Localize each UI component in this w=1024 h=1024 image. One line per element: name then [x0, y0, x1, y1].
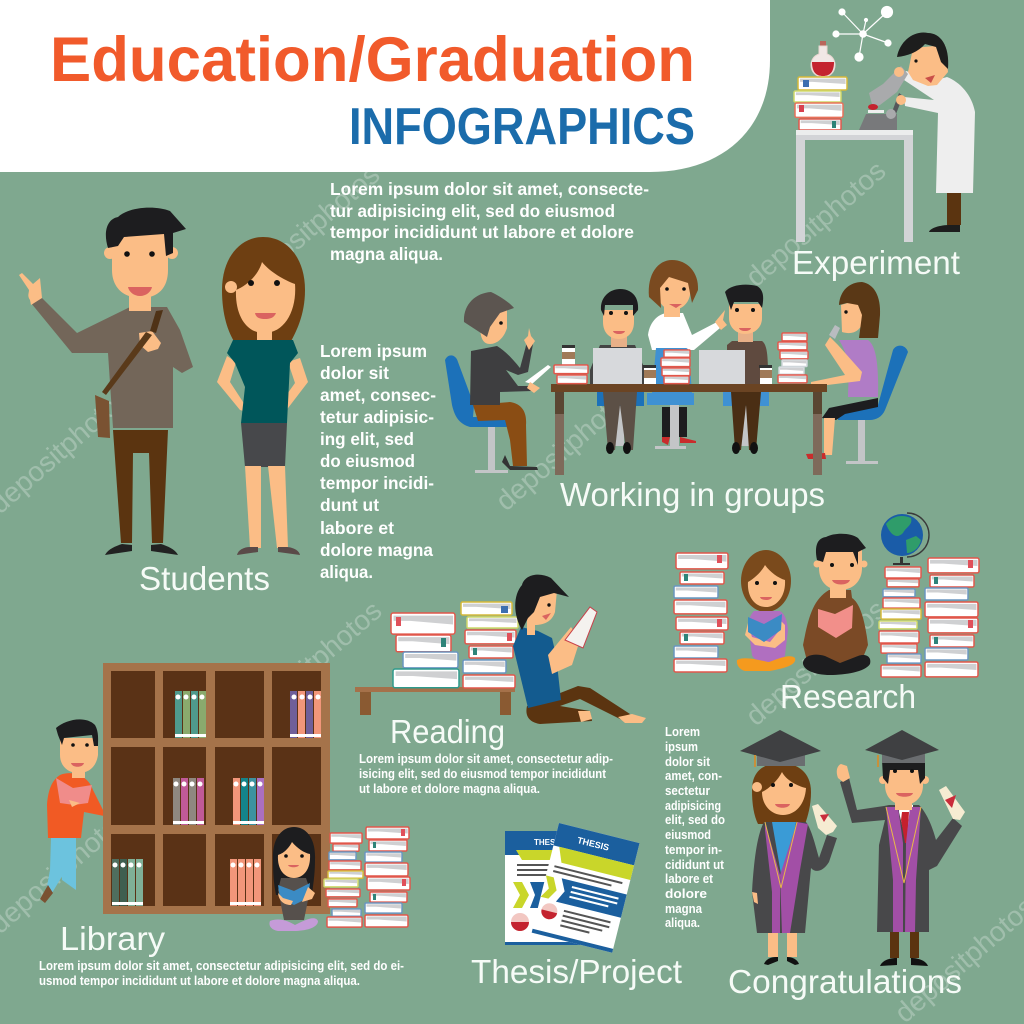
paragraph: top — [330, 179, 649, 264]
paragraph: library: usmod tempor incididunt ut labore et dolore magna aliqua. — [39, 973, 360, 988]
book stack: right — [925, 558, 979, 677]
label: library: Library — [60, 920, 166, 957]
label: congratulations: Congratulations — [728, 963, 962, 1000]
paragraph: thesis: cididunt ut — [665, 857, 725, 872]
graduate man — [837, 730, 965, 966]
icon: flask — [811, 41, 835, 77]
person: standing woman — [647, 260, 727, 449]
paragraph: reading — [359, 751, 613, 796]
icon: microscope — [859, 66, 908, 130]
paragraph: students: do eiusmod — [320, 451, 415, 471]
girl reading on floor — [269, 827, 318, 931]
watermarks: depositphotos — [236, 595, 388, 733]
reading man — [513, 575, 646, 724]
paragraph: thesis: dolore — [665, 886, 707, 901]
paragraph: reading: Lorem ipsum dolor sit amet, consectetur adip- — [359, 751, 613, 766]
person: man right of woman — [699, 285, 769, 454]
paragraph: top: Lorem ipsum dolor sit amet, consecte- — [330, 179, 649, 199]
lab table — [796, 130, 913, 242]
coffee cups — [562, 345, 772, 384]
person: man with laptop — [590, 289, 645, 454]
label: working in groups: Working in groups — [560, 476, 825, 513]
paragraph: students: aliqua. — [320, 562, 373, 582]
paragraph: thesis: adipisicing — [665, 798, 721, 813]
paragraph: thesis: labore et — [665, 871, 714, 886]
paragraph: reading: isicing elit, sed do eiusmod tempor incididunt — [359, 766, 607, 781]
paragraph: thesis: Lorem — [665, 724, 700, 739]
icon: globe — [881, 513, 929, 565]
panel: thesis — [505, 823, 640, 953]
book stack: beside case right — [365, 827, 410, 927]
title: Education/Graduation — [50, 25, 695, 95]
paragraph: students: tetur adipisic- — [320, 407, 434, 427]
person: right woman with chair — [806, 282, 908, 464]
paragraph: thesis: eiusmod — [665, 827, 711, 842]
label: reading: Reading — [390, 713, 505, 750]
book stack: beside case left — [324, 833, 363, 927]
watermarks: depositphotos — [740, 594, 892, 732]
graduation cap: man — [865, 730, 939, 767]
graduate woman — [740, 730, 837, 965]
paragraph: thesis: tempor in- — [665, 842, 722, 857]
paragraph: students: labore et — [320, 518, 394, 538]
panel: library — [40, 663, 410, 931]
paragraph: library — [39, 958, 404, 988]
shelf books — [112, 691, 321, 906]
subtitle: INFOGRAPHICS — [349, 98, 695, 156]
watermarks: depositphotos — [234, 159, 386, 297]
paragraph: students: dolor sit — [320, 363, 389, 383]
book stack: right — [461, 602, 518, 688]
book stack: left — [674, 553, 728, 672]
panel: working in groups — [445, 260, 908, 475]
paragraph: students: dolore magna — [320, 540, 433, 560]
paragraph: students: Lorem ipsum — [320, 341, 427, 361]
watermarks: depositphotos — [490, 379, 642, 517]
paragraph: top: magna aliqua. — [330, 244, 443, 264]
book stack: middle — [879, 567, 921, 677]
bench — [355, 687, 515, 715]
student: girl reading — [737, 550, 795, 671]
paragraph: thesis — [665, 724, 725, 930]
paragraph: thesis: dolor sit — [665, 754, 711, 769]
table book stacks — [554, 333, 808, 384]
paragraph: thesis: amet, con- — [665, 768, 722, 783]
boy with book — [40, 719, 104, 903]
paragraph: students: ing elit, sed — [320, 429, 414, 449]
label: research: Research — [780, 678, 916, 715]
paragraph: library: Lorem ipsum dolor sit amet, consectetur adipisicing elit, sed do ei- — [39, 958, 404, 973]
bookcase — [103, 663, 330, 914]
student man — [19, 208, 193, 555]
paragraph: thesis: magna — [665, 901, 703, 916]
scientist — [897, 32, 975, 232]
graduation cap: woman — [740, 730, 821, 767]
paragraph: students — [320, 341, 436, 582]
watermarks: depositphotos — [740, 155, 892, 293]
person: left with chair — [445, 292, 551, 473]
book stack: left — [391, 613, 459, 688]
paragraph: top: tempor incididunt ut labore et dolore — [330, 222, 634, 242]
paragraph: reading: ut labore et dolore magna aliqua. — [359, 781, 540, 796]
panel: reading — [355, 575, 646, 724]
paragraph: top: tur adipisicing elit, sed do eiusmod — [330, 201, 615, 221]
student: boy reading — [803, 534, 870, 675]
book stack — [794, 77, 847, 130]
paragraph: thesis: aliqua. — [665, 915, 700, 930]
label: students: Students — [139, 560, 270, 597]
panel: congratulations — [740, 730, 965, 966]
paragraph: thesis: ipsum — [665, 739, 698, 754]
label: thesis project: Thesis/Project — [471, 953, 682, 990]
panel: students — [19, 208, 308, 555]
paragraph: students: amet, consec- — [320, 385, 436, 405]
student woman — [217, 237, 308, 555]
icon: molecule — [833, 6, 892, 61]
header panel — [0, 0, 770, 172]
table — [551, 384, 827, 475]
paragraph: thesis: sectetur — [665, 783, 710, 798]
panel: research — [674, 513, 979, 677]
thesis front sheet: THESIS — [576, 835, 610, 853]
panel: experiment — [794, 6, 975, 242]
label: experiment: Experiment — [792, 244, 960, 281]
paragraph: students: tempor incidi- — [320, 473, 434, 493]
paragraph: students: dunt ut — [320, 495, 379, 515]
thesis back sheet: THESIS — [534, 838, 564, 847]
paragraph: thesis: elit, sed do — [665, 812, 725, 827]
